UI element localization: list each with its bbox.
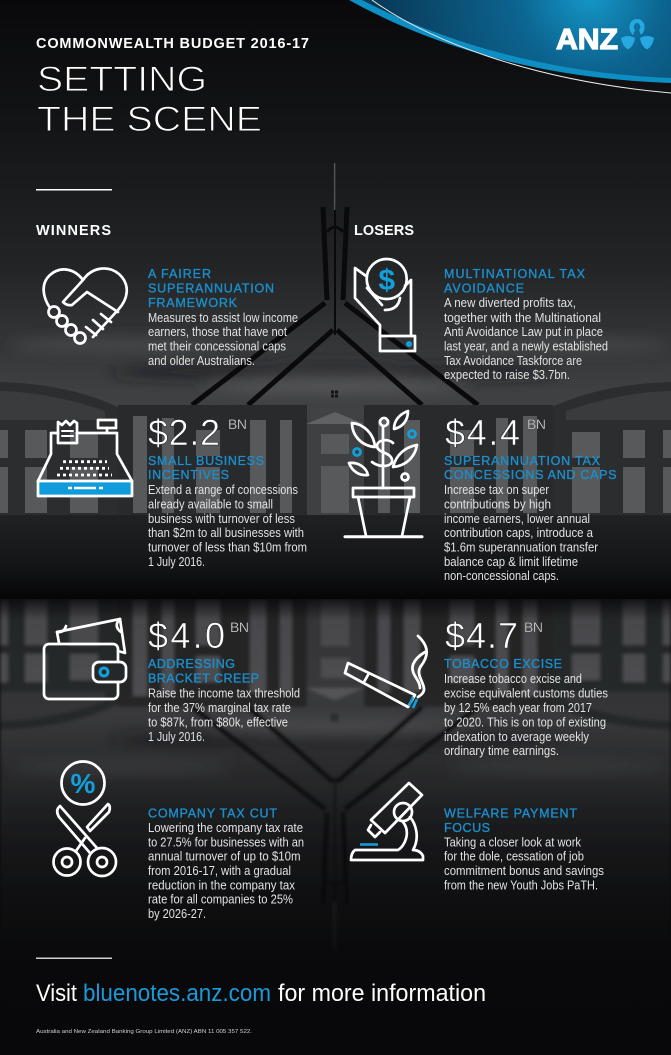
text: fairer superannuation: FRAMEWORK [148, 296, 238, 310]
text: superannuation tax: CONCESSIONS AND CAPS [444, 468, 616, 482]
text: bracket creep: Raise the income tax threshold [148, 687, 300, 701]
text: multinational tax: together with the Multinational [444, 311, 601, 325]
text: welfare payment: FOCUS [444, 821, 490, 835]
text: multinational tax [444, 267, 608, 382]
text: superannuation tax: $1.6m superannuation transfer [444, 540, 598, 554]
dollar symbol and cuff button: $ [378, 264, 395, 297]
panel: small business incentives [38, 412, 307, 569]
text: tobacco excise: to 2020. This is on top of existing [444, 716, 606, 730]
text: bracket creep: to $87k, from $80k, effective [148, 716, 288, 730]
header text: THE SCENE [37, 100, 262, 139]
header text [36, 36, 309, 139]
text: company tax cut: COMPANY TAX CUT [148, 806, 277, 820]
text: welfare payment: commitment bonus and savings [444, 864, 604, 878]
text: company tax cut [148, 806, 304, 921]
figure: $4.4 BN: $4.4 [445, 412, 520, 453]
text: fairer superannuation: earners, those that have not [148, 325, 287, 339]
header text: COMMONWEALTH BUDGET 2016-17 [36, 36, 309, 52]
text: superannuation tax: contributions by high [444, 498, 551, 512]
text: fairer superannuation: Measures to assist low income [148, 311, 298, 325]
text: welfare payment [444, 806, 604, 892]
figure: $4.0 BN: BN [230, 619, 249, 635]
panel: addressing bracket creep [44, 615, 300, 744]
icon: microscope [351, 783, 423, 860]
figure: $2.2 BN: $2.2 [148, 412, 220, 453]
text: superannuation tax: non-concessional caps. [444, 569, 559, 583]
text: welfare payment: from the new Youth Jobs PaTH. [444, 878, 598, 892]
icon: cash register [38, 420, 132, 496]
text: superannuation tax: income earners, lower annual [444, 512, 590, 526]
text: welfare payment: Taking a closer look at work [444, 836, 582, 850]
ANZ logo [556, 19, 654, 56]
text: bracket creep: 1 July 2016. [148, 730, 205, 744]
panel: multinational tax avoidance [355, 259, 608, 382]
text: superannuation tax: balance cap & limit lifetime [444, 555, 578, 569]
text: multinational tax: MULTINATIONAL TAX [444, 267, 586, 281]
text: company tax cut: by 2026-27. [148, 907, 206, 921]
text: multinational tax: A new diverted profits tax, [444, 296, 576, 310]
icon: scissors and percent: % [71, 768, 96, 799]
text: welfare payment: for the dole, cessation of job [444, 850, 584, 864]
text: small business: SMALL BUSINESS [148, 454, 264, 468]
footer call to action [36, 980, 486, 1007]
text: small business: INCENTIVES [148, 468, 229, 482]
text: tobacco excise: by 12.5% each year from 2017 [444, 701, 592, 715]
text: fairer superannuation [148, 267, 298, 368]
heading: losers: LOSERS [354, 223, 414, 239]
panel: welfare payment focus [351, 783, 604, 892]
figure: $4.4 BN: BN [527, 416, 546, 432]
text: superannuation tax [444, 454, 616, 583]
text: tobacco excise: excise equivalent customs duties [444, 687, 608, 701]
icon: scissors and percent [54, 762, 116, 876]
icon: wallet [44, 619, 126, 699]
heading: winners: WINNERS [36, 223, 111, 239]
text: small business: already available to small [148, 498, 273, 512]
text: small business: than $2m to all businesses with [148, 526, 304, 540]
icon: money plant in pot [345, 411, 422, 537]
text: superannuation tax: contribution caps, introduce a [444, 526, 593, 540]
text: fairer superannuation: A FAIRER [148, 267, 211, 281]
text: multinational tax: AVOIDANCE [444, 282, 524, 296]
footer call to action: bluenotes.anz.com [83, 980, 271, 1007]
panel: company tax cut [54, 762, 304, 921]
text: tobacco excise: ordinary time earnings. [444, 744, 559, 758]
text: fairer superannuation: SUPERANNUATION [148, 282, 274, 296]
figure: $2.2 BN: BN [228, 416, 247, 432]
panel: tobacco excise [345, 615, 608, 758]
text: tobacco excise: Increase tobacco excise and [444, 672, 582, 686]
text: multinational tax: last year, and a newly established [444, 340, 608, 354]
text: bracket creep: BRACKET CREEP [148, 672, 259, 686]
ANZ logo: ANZ [556, 24, 618, 56]
text: multinational tax: expected to raise $3.7bn. [444, 368, 570, 382]
dollar symbol and cuff button [378, 264, 412, 347]
footer call to action: Visit [36, 980, 77, 1007]
text: company tax cut: to 27.5% for businesses with an [148, 836, 304, 850]
text: company tax cut: annual turnover of up to $10m [148, 850, 300, 864]
text: small business [148, 454, 307, 569]
text: company tax cut: reduction in the company tax [148, 878, 296, 892]
panel: a fairer superannuation framework [44, 267, 298, 368]
footer call to action: for more information [278, 980, 486, 1007]
figure: $4.0 BN: $4.0 [148, 615, 225, 656]
text: company tax cut: Lowering the company tax rate [148, 821, 303, 835]
blue ANZ corner swoosh [349, 0, 671, 93]
text: small business: business with turnover of less [148, 512, 295, 526]
text: bracket creep: ADDRESSING [148, 657, 235, 671]
text: fairer superannuation: met their concessional caps [148, 340, 286, 354]
text: multinational tax: Tax Avoidance Taskforce are [444, 354, 582, 368]
text: small business: turnover of less than $10m from [148, 540, 307, 554]
figure: $4.7 BN: BN [524, 619, 543, 635]
text: bracket creep [148, 657, 300, 744]
text: tobacco excise [444, 657, 608, 758]
icon: handshake heart [44, 268, 127, 344]
icon: cigarette and smoke [345, 636, 427, 708]
text: company tax cut: rate for all companies to 25% [148, 892, 293, 906]
text: multinational tax: Anti Avoidance Law put in place [444, 325, 603, 339]
text: superannuation tax: Increase tax on super [444, 483, 549, 497]
text: fairer superannuation: and older Australians. [148, 354, 255, 368]
text: superannuation tax: SUPERANNUATION TAX [444, 454, 601, 468]
text: small business: 1 July 2016. [148, 555, 205, 569]
footer legal line: Australia and New Zealand Banking Group Limited (ANZ) ABN 11 005 357 522. [36, 1029, 253, 1035]
icon: hand holding coin [355, 259, 415, 351]
figure: $4.7 BN: $4.7 [445, 615, 518, 656]
panel: superannuation tax concessions [345, 411, 616, 583]
text: welfare payment: WELFARE PAYMENT [444, 806, 577, 820]
text: tobacco excise: indexation to average weekly [444, 730, 590, 744]
text: small business: Extend a range of concessions [148, 483, 298, 497]
text: company tax cut: from 2016-17, with a gradual [148, 864, 291, 878]
text: bracket creep: for the 37% marginal tax rate [148, 701, 291, 715]
text: tobacco excise: TOBACCO EXCISE [444, 657, 562, 671]
header text: SETTING [37, 60, 207, 99]
